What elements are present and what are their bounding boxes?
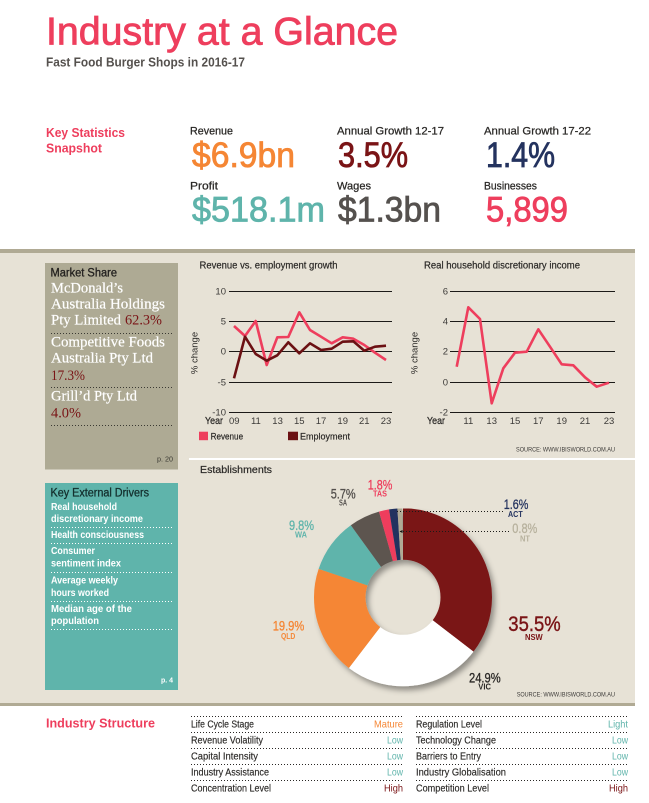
company: Competitive Foods xyxy=(51,335,165,384)
x axis labels xyxy=(463,416,614,427)
table: right column: Low xyxy=(612,751,628,763)
stat: annual growth 17-22: 1.4% xyxy=(486,136,555,175)
stat: businesses: 5,899 xyxy=(486,190,568,230)
table: left column: Industry Assistance xyxy=(191,767,269,779)
x axis labels: 11 xyxy=(251,416,261,427)
legend: revenue xyxy=(199,432,243,442)
y axis labels: -5 xyxy=(218,378,226,388)
label: SA: 5.7% xyxy=(331,485,356,501)
company: McDonald's: 62.3% xyxy=(125,313,162,329)
driver list: population xyxy=(51,615,99,627)
driver list: Average weekly xyxy=(51,574,118,586)
title: Industry at a Glance xyxy=(46,10,398,54)
heading: key external drivers: Key External Drivers xyxy=(50,488,149,500)
x axis labels: 13 xyxy=(486,416,497,427)
panel: key statistics snapshot xyxy=(46,126,591,230)
panel: key external drivers xyxy=(45,483,178,690)
line: employment xyxy=(234,337,386,378)
stat: revenue: $6.9bn xyxy=(192,136,295,175)
y axis labels: 0 xyxy=(221,346,226,358)
driver list: Consumer xyxy=(51,545,95,557)
label: QLD: QLD xyxy=(281,632,295,641)
heading: industry structure: Industry Structure xyxy=(46,716,155,731)
x axis title: Year xyxy=(205,416,224,427)
x axis labels: 19 xyxy=(337,416,348,427)
y axis labels: -10 xyxy=(212,408,226,418)
label: NT xyxy=(512,520,537,544)
x axis labels: 19 xyxy=(556,416,567,427)
chart: revenue vs employment growth xyxy=(190,259,392,442)
y axis title: % change xyxy=(190,332,200,374)
heading: key statistics: Snapshot xyxy=(46,142,103,156)
label: WA: 9.8% xyxy=(289,517,314,533)
driver list: hours worked xyxy=(51,587,109,599)
company: McDonald's: McDonald’s xyxy=(51,280,123,296)
stat: wages: Wages xyxy=(337,180,372,192)
driver list: sentiment index xyxy=(51,558,121,570)
label: VIC xyxy=(469,669,501,692)
company: Competitive Foods: Australia Pty Ltd xyxy=(51,351,154,367)
label: NT: NT xyxy=(520,535,530,544)
y axis labels: 10 xyxy=(215,286,226,298)
line: revenue xyxy=(234,312,386,365)
legend: revenue: Revenue xyxy=(211,432,243,442)
stat: annual growth 17-22: Annual Growth 17-22 xyxy=(484,126,591,138)
panel: market share xyxy=(45,263,178,470)
heading: key statistics: Key Statistics xyxy=(46,126,125,140)
table: left column: Low xyxy=(387,735,403,747)
x axis labels: 21 xyxy=(359,416,370,427)
label: NT: 0.8% xyxy=(512,520,537,536)
x axis labels: 17 xyxy=(533,416,544,427)
company: McDonald's: Australia Holdings xyxy=(51,296,165,312)
stat: annual growth 12-17: 3.5% xyxy=(338,136,408,175)
table: left column: Revenue Volatility xyxy=(191,735,264,747)
table: right column: High xyxy=(609,783,628,795)
table: left column: High xyxy=(384,783,403,795)
label: TAS: 1.8% xyxy=(368,476,392,492)
driver list: Health consciousness xyxy=(51,529,144,541)
stat: profit: Profit xyxy=(190,180,218,192)
y axis title: % change xyxy=(410,332,420,374)
table: left column: Capital Intensity xyxy=(191,751,259,763)
company: Grill'd: Grill’d Pty Ltd xyxy=(51,389,138,405)
y axis labels: 4 xyxy=(443,316,448,328)
heading: market share: Market Share xyxy=(50,268,117,280)
chart: real household discretionary income xyxy=(410,259,615,454)
x axis labels: 15 xyxy=(510,416,520,427)
table: right column: Low xyxy=(612,767,628,779)
label: ACT: ACT xyxy=(508,510,523,519)
table: left column: Low xyxy=(387,767,403,779)
y axis labels: 0 xyxy=(443,378,448,388)
table: left column: Life Cycle Stage xyxy=(191,719,254,731)
table: left column xyxy=(191,719,403,795)
table: right column xyxy=(416,719,628,795)
x axis labels: 11 xyxy=(463,416,473,427)
table: right column: Regulation Level xyxy=(416,719,482,731)
leader lines xyxy=(397,512,510,533)
y axis labels: -2 xyxy=(440,408,448,418)
source note: SOURCE: WWW.IBISWORLD.COM.AU xyxy=(516,447,615,454)
donut ring xyxy=(340,534,466,661)
y axis labels: 2 xyxy=(443,346,448,358)
table: left column: Low xyxy=(387,751,403,763)
company: McDonald's: Pty Limited xyxy=(51,313,122,329)
company: Grill'd: 4.0% xyxy=(51,406,81,422)
table: right column: Industry Globalisation xyxy=(416,767,506,779)
stat: annual growth 17-22 xyxy=(484,126,591,175)
x axis labels: 23 xyxy=(604,416,614,427)
stat: annual growth 12-17 xyxy=(337,126,444,175)
panel: industry structure xyxy=(46,716,628,795)
chart title: Establishments xyxy=(200,464,272,476)
heading: key statistics xyxy=(46,126,125,156)
source note: SOURCE: WWW.IBISWORLD.COM.AU xyxy=(517,692,615,699)
y axis labels: 5 xyxy=(221,316,226,328)
stat: businesses: Businesses xyxy=(484,180,537,192)
label: TAS: TAS xyxy=(373,490,388,499)
label: QLD: 19.9% xyxy=(273,618,304,634)
table: right column: Barriers to Entry xyxy=(416,751,482,763)
table: left column: Mature xyxy=(374,719,403,731)
company: Competitive Foods: Competitive Foods xyxy=(51,335,165,351)
label: WA xyxy=(289,517,314,540)
chart title: Real household discretionary income xyxy=(424,259,580,271)
label: VIC: VIC xyxy=(478,683,491,692)
table: right column: Low xyxy=(612,735,628,747)
label: TAS xyxy=(368,476,392,499)
label: SA: SA xyxy=(339,499,347,508)
stat: wages: $1.3bn xyxy=(338,190,441,230)
y axis labels xyxy=(212,286,226,418)
x axis labels: 23 xyxy=(381,416,391,427)
x axis title: Year xyxy=(427,416,446,427)
table: right column: Technology Change xyxy=(416,735,496,747)
x axis labels: 21 xyxy=(580,416,590,427)
label: ACT: 1.6% xyxy=(504,496,528,512)
line: income xyxy=(457,307,609,403)
label: SA xyxy=(331,485,356,508)
y axis labels xyxy=(440,286,448,418)
driver list: Real household xyxy=(51,501,117,513)
x axis labels: 17 xyxy=(316,416,326,427)
label: ACT xyxy=(504,496,528,519)
y axis labels: 6 xyxy=(443,286,448,298)
page reference: p. 4 xyxy=(161,675,174,684)
stat: annual growth 12-17: Annual Growth 12-17 xyxy=(337,126,444,138)
chart: establishments donut xyxy=(200,464,615,699)
x axis labels: 13 xyxy=(272,416,283,427)
stat: profit: $518.1m xyxy=(192,190,325,230)
company: Competitive Foods: 17.3% xyxy=(51,368,85,384)
x axis labels: 15 xyxy=(294,416,305,427)
label: NSW: 35.5% xyxy=(508,613,561,636)
chart title: Revenue vs. employment growth xyxy=(200,259,338,271)
driver list xyxy=(51,501,144,627)
table: left column: Concentration Level xyxy=(191,783,271,795)
table: right column: Competition Level xyxy=(416,783,489,795)
page reference: p. 20 xyxy=(157,455,173,464)
stat: revenue: Revenue xyxy=(190,126,233,138)
label: QLD xyxy=(273,618,304,641)
company: Grill'd xyxy=(51,389,138,422)
legend: employment: Employment xyxy=(300,432,350,442)
panel: beige background xyxy=(0,249,635,706)
label: WA: WA xyxy=(295,531,307,540)
label: NSW: NSW xyxy=(525,632,544,642)
company: McDonald's xyxy=(51,280,165,329)
subtitle: Fast Food Burger Shops in 2016-17 xyxy=(46,54,245,70)
label: VIC: 24.9% xyxy=(469,669,501,685)
driver list: discretionary income xyxy=(51,513,143,525)
table: right column: Light xyxy=(608,719,628,731)
x axis labels: 09 xyxy=(229,416,240,427)
driver list: Median age of the xyxy=(51,603,132,615)
x axis labels xyxy=(229,416,391,427)
